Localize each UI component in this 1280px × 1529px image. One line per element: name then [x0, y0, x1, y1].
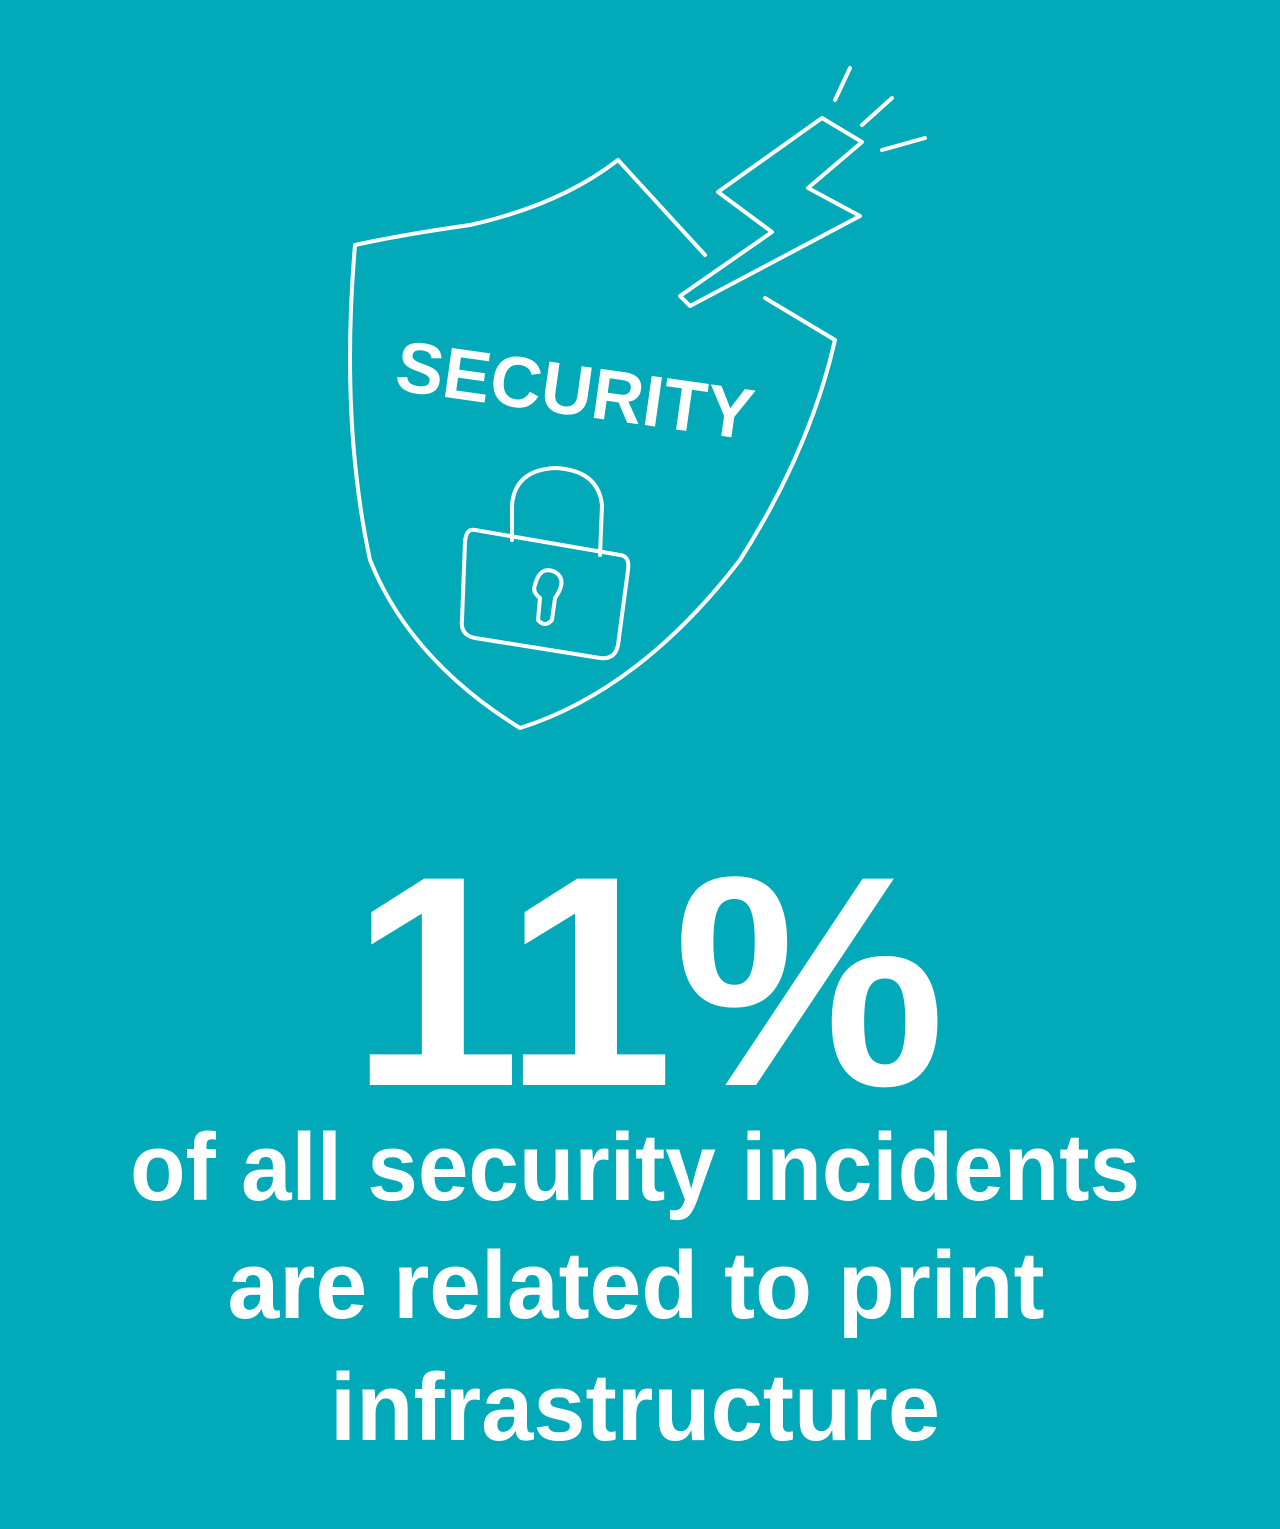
icon: lightning bolt — [680, 68, 925, 306]
statement text: of all security incidents — [130, 1114, 1140, 1221]
statement text: are related to print — [228, 1232, 1044, 1339]
statement text: infrastructure — [330, 1354, 940, 1461]
big number: 11% — [350, 813, 946, 1149]
statement text — [130, 1114, 1140, 1461]
icon: padlock — [462, 468, 628, 658]
shield label SECURITY: SECURITY — [391, 326, 759, 456]
shield outline — [350, 160, 835, 728]
icon: security shield — [350, 68, 925, 728]
